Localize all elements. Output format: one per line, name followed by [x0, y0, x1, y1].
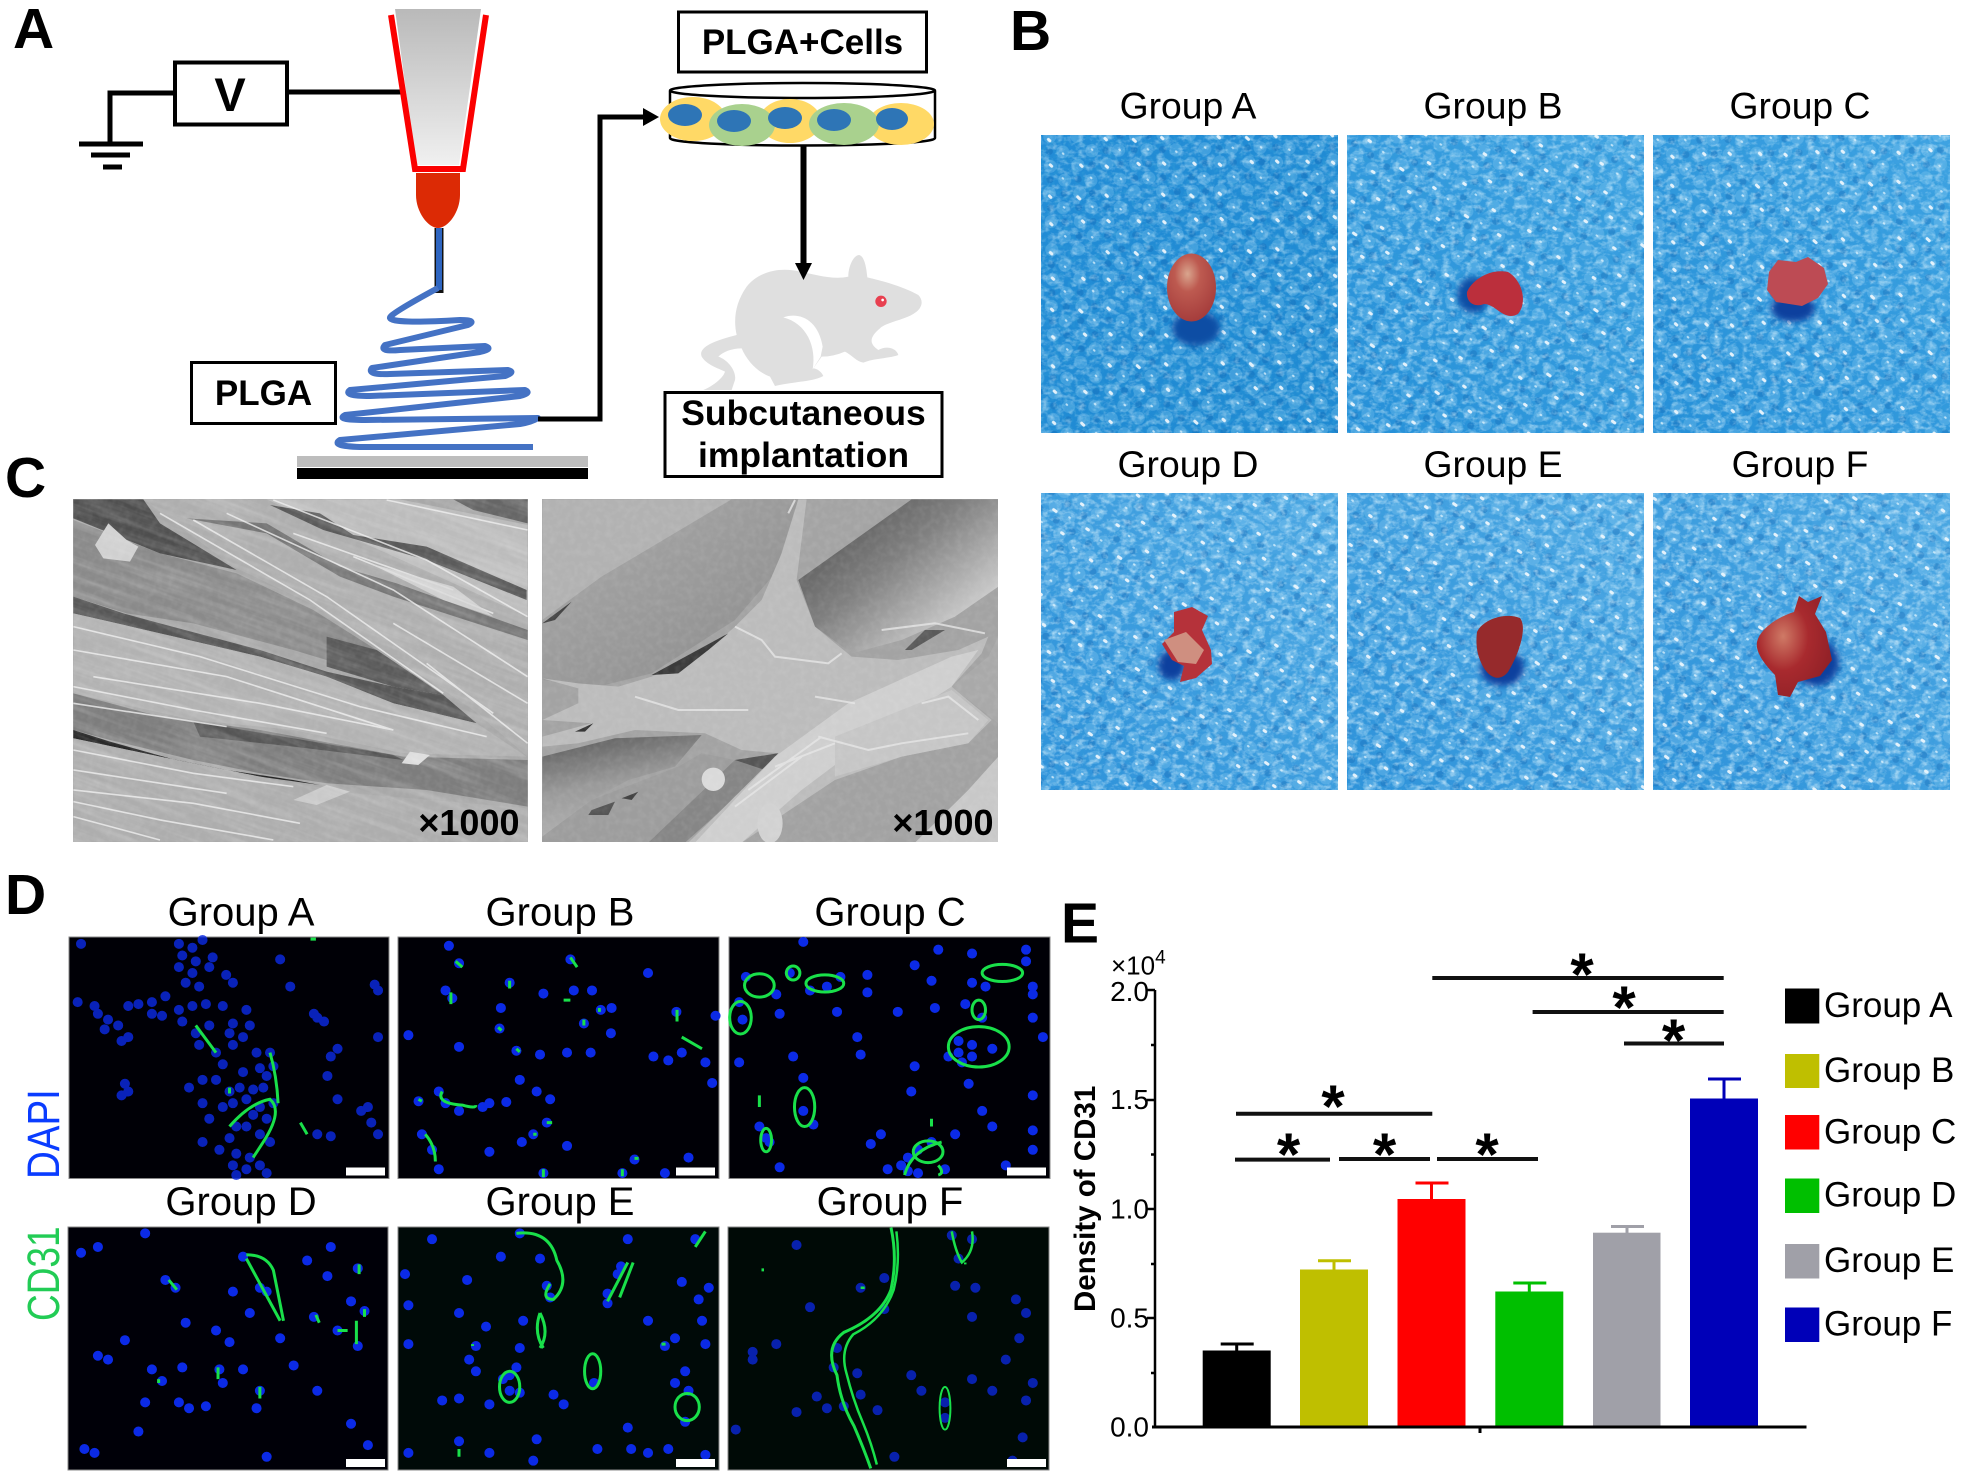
fluorescence image Group D: Group D — [165, 1180, 317, 1224]
fluorescence image Group B: Group B — [486, 890, 634, 934]
collector plate — [297, 456, 588, 479]
photo Group E: Group E — [1424, 443, 1562, 485]
scale bar — [1007, 1459, 1046, 1467]
y axis and ticks: 1.5 — [1110, 1084, 1149, 1115]
Subcutaneous implantation label box: Subcutaneous — [681, 393, 926, 433]
bar Group F — [1690, 1079, 1758, 1427]
panel E: CD31 density bar chart — [1061, 892, 1956, 1442]
photo Group D: Group D — [1118, 443, 1258, 485]
arrow to culture dish — [538, 108, 659, 419]
fluorescence image Group B — [398, 890, 719, 1178]
axis multiplier: ×10 — [1111, 950, 1155, 980]
rotated channel label DAPI: DAPI — [18, 1089, 69, 1179]
significance brackets and stars — [1235, 941, 1724, 1188]
nozzle and needle — [391, 9, 486, 293]
significance brackets and stars: * — [1612, 974, 1636, 1041]
scale bar — [676, 1459, 715, 1467]
fluorescence image Group A — [69, 890, 389, 1178]
y axis title: Density of CD31 — [1069, 1086, 1102, 1312]
PLGA label box — [192, 362, 336, 424]
culture dish with cells — [660, 83, 935, 146]
voltage circuit with ground — [79, 62, 405, 167]
bar Group A — [1203, 1344, 1271, 1427]
photo Group E — [1347, 443, 1644, 790]
significance brackets and stars: * — [1475, 1121, 1499, 1188]
significance brackets and stars: * — [1570, 941, 1594, 1008]
fluorescence image Group A: Group A — [168, 890, 315, 934]
scale bar — [676, 1168, 715, 1176]
PLGA+Cells label box — [678, 12, 926, 72]
legend: Group C — [1824, 1112, 1956, 1152]
bar Group B — [1300, 1261, 1368, 1427]
panel letter E: E — [1061, 892, 1099, 956]
voltage circuit with ground: V — [214, 68, 246, 121]
photo Group B: Group B — [1424, 84, 1562, 126]
y axis and ticks: 1.0 — [1110, 1194, 1149, 1224]
photo Group F: Group F — [1732, 443, 1868, 485]
SEM image with attached cell — [542, 499, 998, 843]
panel C: SEM micrographs — [7, 458, 998, 842]
panel letter B: B — [1010, 0, 1051, 63]
fluorescence image Group E — [398, 1180, 719, 1470]
legend: Group B — [1824, 1051, 1954, 1090]
bar Group C — [1398, 1183, 1466, 1427]
legend: Group E — [1824, 1241, 1954, 1280]
fluorescence image Group E: Group E — [486, 1180, 634, 1224]
rotated channel label CD31: CD31 — [19, 1226, 69, 1321]
panel letter C: C — [5, 446, 46, 510]
PLGA label box: PLGA — [215, 374, 312, 413]
fluorescence image Group C: Group C — [814, 890, 966, 934]
photo Group A — [1041, 84, 1338, 433]
fluorescence image Group D — [68, 1180, 388, 1470]
Subcutaneous implantation label box: implantation — [698, 435, 909, 475]
SEM image with attached cell: ×1000 — [892, 802, 994, 843]
bar Group E — [1593, 1226, 1660, 1427]
scale bar — [1007, 1168, 1046, 1176]
significance brackets and stars: * — [1662, 1007, 1686, 1074]
PLGA fibre spiral — [338, 288, 538, 447]
Subcutaneous implantation label box — [665, 392, 942, 476]
x axis — [1152, 1427, 1806, 1433]
photo Group C — [1653, 84, 1950, 433]
legend: Group D — [1824, 1176, 1956, 1214]
panel A: electrospinning schematic — [13, 0, 942, 479]
PLGA+Cells label box: PLGA+Cells — [702, 23, 903, 62]
panel letter D: D — [5, 863, 46, 927]
legend: Group A — [1824, 986, 1953, 1025]
significance brackets and stars: * — [1277, 1121, 1301, 1188]
fluorescence image Group F — [728, 1180, 1049, 1470]
significance brackets and stars: * — [1373, 1121, 1397, 1188]
y axis and ticks: 0.5 — [1110, 1302, 1149, 1334]
y axis and ticks — [1110, 976, 1155, 1442]
axis multiplier: 4 — [1155, 948, 1166, 968]
scale bar — [346, 1459, 385, 1467]
panel D: immunofluorescence — [5, 863, 1050, 1470]
scale bar — [346, 1168, 385, 1176]
significance brackets and stars: * — [1321, 1073, 1345, 1140]
fluorescence image Group F: Group F — [817, 1180, 963, 1224]
legend: Group F — [1824, 1304, 1952, 1344]
photo Group D — [1041, 443, 1338, 790]
photo Group C: Group C — [1730, 84, 1870, 126]
bar Group D — [1495, 1283, 1563, 1427]
photo Group F — [1653, 443, 1950, 790]
y axis and ticks: 0.0 — [1110, 1412, 1149, 1442]
photo Group B — [1347, 84, 1644, 433]
arrow to mouse — [795, 145, 812, 280]
y axis and ticks: 2.0 — [1110, 976, 1149, 1007]
panel B: explant photographs — [1010, 0, 1950, 790]
mouse illustration — [701, 255, 922, 390]
photo Group A: Group A — [1120, 84, 1257, 126]
legend — [1785, 986, 1956, 1344]
SEM image scaffold — [73, 499, 528, 842]
fluorescence image Group C — [729, 890, 1050, 1178]
SEM image scaffold: ×1000 — [418, 802, 520, 843]
